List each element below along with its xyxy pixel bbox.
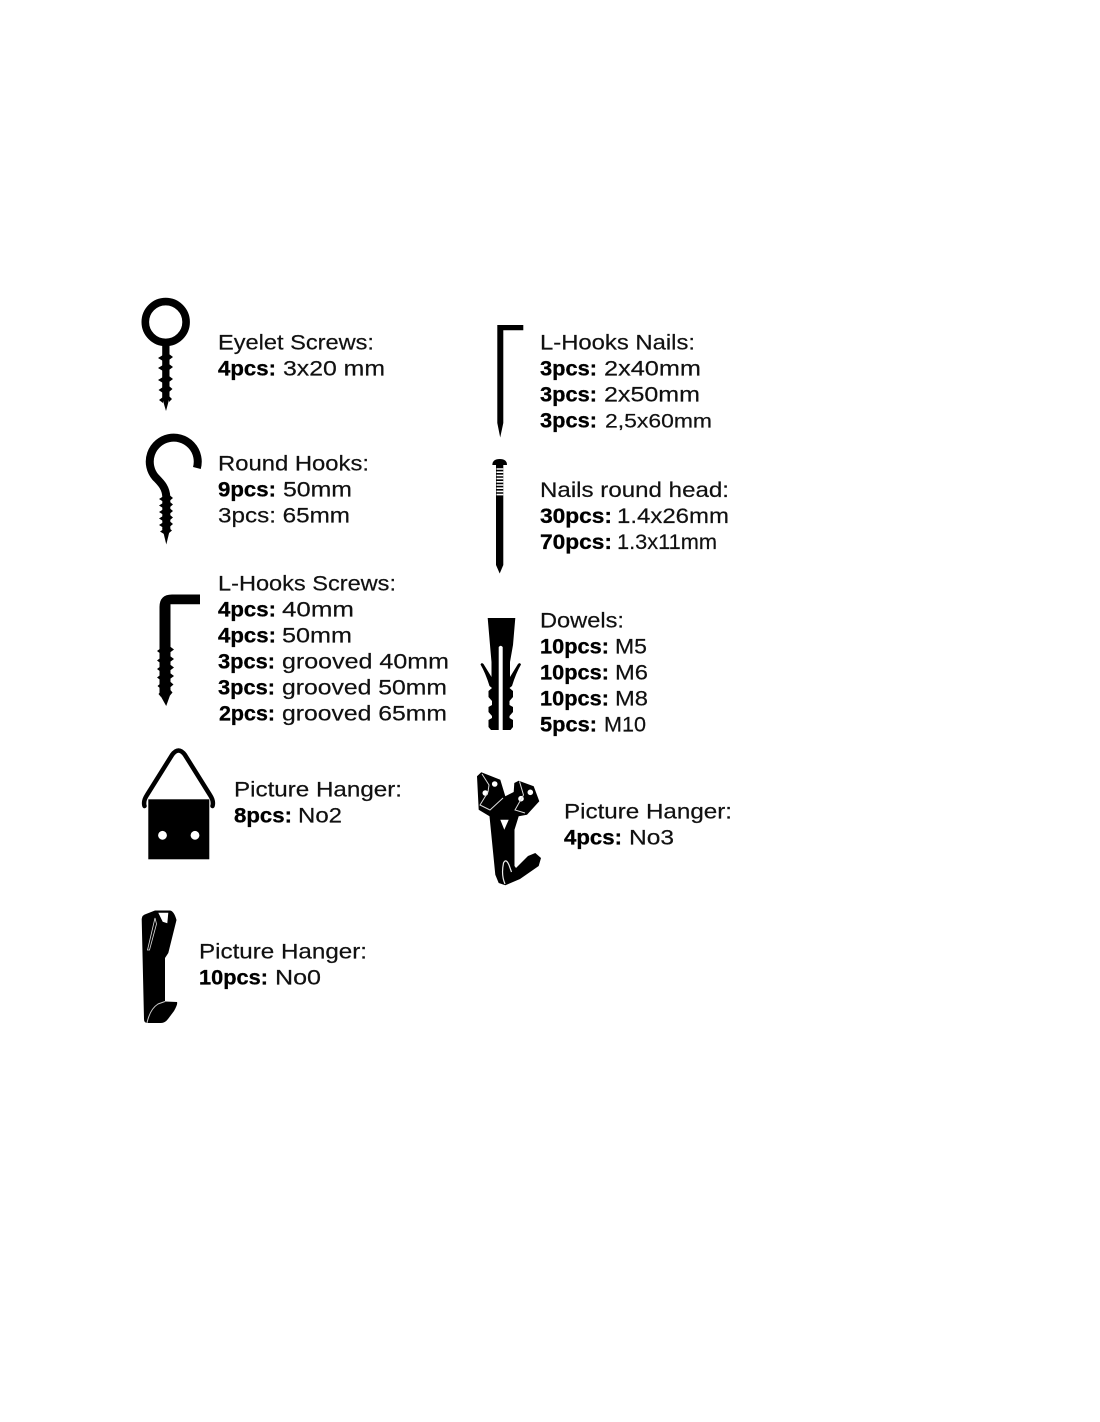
text: L-hooks screws: 4pcs: (218, 598, 276, 622)
text: L-hooks nails (540, 332, 712, 432)
text: nails round head: Nails round head: (540, 479, 729, 502)
text: L-hooks nails: 3pcs: (540, 384, 597, 406)
text: picture hanger No2: Picture Hanger: (234, 778, 402, 802)
text: L-hooks screws: grooved 50mm (282, 676, 447, 700)
text: L-hooks screws: 2pcs: (219, 702, 275, 726)
text: L-hooks nails: 2x50mm (604, 384, 700, 406)
item: eyelet screws (145, 302, 385, 411)
text: round hooks (218, 452, 369, 528)
icon: picture hanger No3 (477, 772, 541, 885)
text: dowels: M6 (615, 662, 648, 684)
text: picture hanger No0 (199, 940, 367, 990)
text: round hooks: Round Hooks: (218, 452, 369, 476)
text: dowels: 5pcs: (540, 714, 597, 736)
text: nails round head (540, 479, 729, 554)
text: dowels: M8 (615, 688, 648, 710)
icon: L-hook nail (497, 325, 523, 438)
text: round hooks: 3pcs: 65mm (218, 504, 350, 528)
item: picture hanger No3 (477, 772, 732, 885)
icon: dowel (480, 618, 521, 731)
text: L-hooks nails: 2x40mm (604, 358, 701, 380)
text: picture hanger No2: No2 (298, 804, 342, 828)
item: dowels (480, 610, 648, 736)
text: eyelet screws (218, 332, 385, 380)
item: round hooks (150, 438, 369, 544)
text: dowels: 10pcs: (540, 636, 609, 658)
item: L-hooks screws (157, 572, 449, 726)
text: picture hanger No2: 8pcs: (234, 804, 292, 828)
icon: round hook (150, 438, 198, 544)
text: picture hanger No3: Picture Hanger: (564, 800, 732, 824)
text: dowels: Dowels: (540, 610, 624, 632)
text: dowels: M5 (615, 636, 647, 658)
text: eyelet screws: Eyelet Screws: (218, 332, 374, 354)
text: L-hooks screws: 3pcs: (218, 676, 275, 700)
item: picture hanger No2 (144, 750, 402, 859)
text: round hooks: 9pcs: (218, 478, 276, 502)
text: dowels: 10pcs: (540, 688, 609, 710)
text: eyelet screws: 4pcs: (218, 358, 276, 380)
icon: L-hook screw (157, 594, 200, 706)
text: nails round head: 70pcs: (540, 531, 612, 554)
text: picture hanger No0: Picture Hanger: (199, 940, 367, 964)
text: picture hanger No3 (564, 800, 732, 850)
icon: round head nail (492, 459, 507, 574)
text: round hooks: 50mm (283, 478, 352, 502)
text: dowels: M10 (604, 714, 646, 736)
text: L-hooks screws: 50mm (282, 624, 352, 648)
text: nails round head: 30pcs: (540, 505, 612, 528)
text: L-hooks nails: 3pcs: (540, 410, 597, 432)
text: eyelet screws: 3x20 mm (283, 358, 385, 380)
text: L-hooks screws: 4pcs: (218, 624, 276, 648)
text: picture hanger No0: No0 (275, 966, 321, 990)
text: L-hooks nails: 2,5x60mm (605, 412, 712, 432)
text: L-hooks screws: L-Hooks Screws: (218, 572, 396, 596)
item: picture hanger No0 (142, 910, 367, 1023)
item: nails round head (492, 459, 729, 574)
text: L-hooks nails: L-Hooks Nails: (540, 332, 695, 354)
text: dowels (540, 610, 648, 736)
text: L-hooks nails: 3pcs: (540, 358, 597, 380)
text: picture hanger No3: 4pcs: (564, 826, 622, 850)
item: L-hooks nails (497, 325, 712, 438)
text: L-hooks screws: grooved 65mm (282, 702, 447, 726)
icon: picture hanger No0 (142, 910, 177, 1023)
text: L-hooks screws: grooved 40mm (282, 650, 449, 674)
text: L-hooks screws: 3pcs: (218, 650, 275, 674)
text: dowels: 10pcs: (540, 662, 609, 684)
text: L-hooks screws: 40mm (282, 598, 354, 622)
icon: eyelet screw (145, 302, 186, 411)
text: nails round head: 1.4x26mm (617, 505, 729, 528)
icon: picture hanger No2 (144, 750, 213, 859)
text: L-hooks screws (218, 572, 449, 726)
text: nails round head: 1.3x11mm (617, 531, 717, 554)
text: picture hanger No0: 10pcs: (199, 966, 268, 990)
text: picture hanger No3: No3 (629, 826, 674, 850)
text: picture hanger No2 (234, 778, 402, 828)
